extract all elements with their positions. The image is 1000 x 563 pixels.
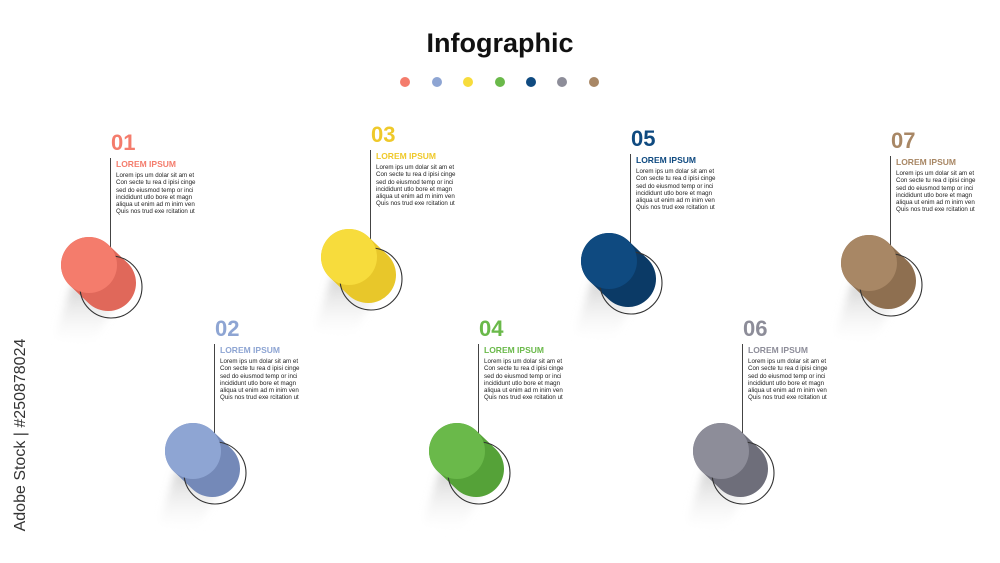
body 01: sed do eiusmod temp or inci — [116, 187, 193, 194]
body 07: aliqua ut enim ad m inim ven — [896, 199, 975, 206]
number 01: 01 — [111, 130, 135, 155]
body 04: Lorem ips um dolar sit am et — [484, 358, 562, 365]
item 07 — [841, 128, 976, 321]
heading 01: LOREM IPSUM — [116, 159, 176, 169]
body 02: sed do eiusmod temp or inci — [220, 373, 297, 380]
body 05: Lorem ips um dolar sit am et — [636, 168, 714, 175]
body 01 — [116, 172, 196, 215]
title: Infographic — [426, 28, 574, 58]
body 06: Quis nos trud exe rcitation ut — [748, 394, 827, 401]
number 05: 05 — [631, 126, 655, 151]
number 04: 04 — [479, 316, 503, 341]
body 03: aliqua ut enim ad m inim ven — [376, 193, 455, 200]
number 02: 02 — [215, 316, 239, 341]
body 04 — [484, 358, 564, 401]
body 02: aliqua ut enim ad m inim ven — [220, 387, 299, 394]
pin 01 — [61, 237, 143, 323]
body 04: Quis nos trud exe rcitation ut — [484, 394, 563, 401]
body 05: sed do eiusmod temp or inci — [636, 183, 713, 190]
body 07: Quis nos trud exe rcitation ut — [896, 206, 975, 213]
color dots — [400, 77, 599, 87]
body 03: incididunt utlo bore et magn — [376, 186, 452, 193]
item 01 — [61, 130, 196, 323]
heading 02: LOREM IPSUM — [220, 345, 280, 355]
body 04: sed do eiusmod temp or inci — [484, 373, 561, 380]
item 06 — [693, 316, 828, 509]
body 03: sed do eiusmod temp or inci — [376, 179, 453, 186]
number 03: 03 — [371, 122, 395, 147]
body 06: incididunt utlo bore et magn — [748, 380, 824, 387]
body 02: Con secte tu rea d ipisi cinge — [220, 365, 299, 372]
body 03: Con secte tu rea d ipisi cinge — [376, 171, 455, 178]
body 02: incididunt utlo bore et magn — [220, 380, 296, 387]
body 03 — [376, 164, 456, 207]
heading 07: LOREM IPSUM — [896, 157, 956, 167]
body 06: Lorem ips um dolar sit am et — [748, 358, 826, 365]
body 03: Lorem ips um dolar sit am et — [376, 164, 454, 171]
body 01: incididunt utlo bore et magn — [116, 194, 192, 201]
heading 06: LOREM IPSUM — [748, 345, 808, 355]
pin 06 — [693, 423, 775, 509]
heading 03: LOREM IPSUM — [376, 151, 436, 161]
body 05: incididunt utlo bore et magn — [636, 190, 712, 197]
body 02: Lorem ips um dolar sit am et — [220, 358, 298, 365]
body 02: Quis nos trud exe rcitation ut — [220, 394, 299, 401]
body 06: Con secte tu rea d ipisi cinge — [748, 365, 827, 372]
item 04 — [429, 316, 564, 509]
body 05 — [636, 168, 716, 211]
body 01: Quis nos trud exe rcitation ut — [116, 208, 195, 215]
pin 03 — [321, 229, 403, 315]
body 01: Con secte tu rea d ipisi cinge — [116, 179, 195, 186]
number 06: 06 — [743, 316, 767, 341]
pin 07 — [841, 235, 923, 321]
number 07: 07 — [891, 128, 915, 153]
body 04: aliqua ut enim ad m inim ven — [484, 387, 563, 394]
pin 05 — [581, 233, 663, 319]
body 02 — [220, 358, 300, 401]
body 05: Con secte tu rea d ipisi cinge — [636, 175, 715, 182]
body 03: Quis nos trud exe rcitation ut — [376, 200, 455, 207]
body 01: aliqua ut enim ad m inim ven — [116, 201, 195, 208]
heading 05: LOREM IPSUM — [636, 155, 696, 165]
body 04: incididunt utlo bore et magn — [484, 380, 560, 387]
body 05: aliqua ut enim ad m inim ven — [636, 197, 715, 204]
body 07: Lorem ips um dolar sit am et — [896, 170, 974, 177]
body 06 — [748, 358, 828, 401]
body 07: incididunt utlo bore et magn — [896, 192, 972, 199]
heading 04: LOREM IPSUM — [484, 345, 544, 355]
body 06: aliqua ut enim ad m inim ven — [748, 387, 827, 394]
body 04: Con secte tu rea d ipisi cinge — [484, 365, 563, 372]
watermark side text: Adobe Stock | #250878024 — [12, 339, 29, 531]
item 02 — [165, 316, 300, 509]
pin 04 — [429, 423, 511, 509]
item 03 — [321, 122, 456, 315]
body 07: Con secte tu rea d ipisi cinge — [896, 177, 975, 184]
pin 02 — [165, 423, 247, 509]
body 06: sed do eiusmod temp or inci — [748, 373, 825, 380]
body 07 — [896, 170, 976, 213]
body 05: Quis nos trud exe rcitation ut — [636, 204, 715, 211]
body 07: sed do eiusmod temp or inci — [896, 185, 973, 192]
item 05 — [581, 126, 716, 319]
body 01: Lorem ips um dolar sit am et — [116, 172, 194, 179]
